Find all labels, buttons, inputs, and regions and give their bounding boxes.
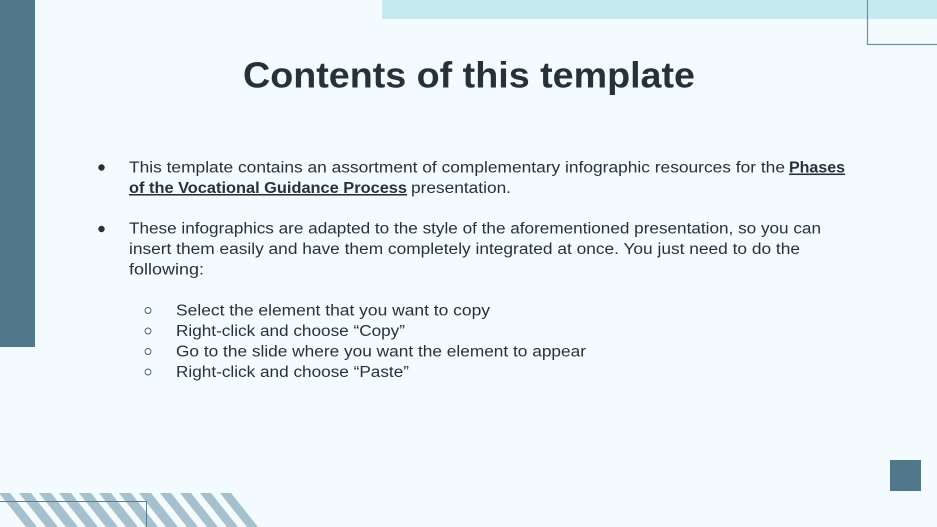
bottom left outlined box (0, 502, 146, 527)
bullet item 1: presentation. (411, 180, 511, 197)
bullet list (98, 160, 845, 381)
left vertical bar (0, 0, 35, 347)
top right outlined box (868, 0, 937, 44)
title: Contents of this template (243, 54, 695, 96)
sub-list steps: Go to the slide where you want the element to appear (176, 344, 586, 360)
sub-list steps (145, 302, 586, 381)
sub-list steps: Right-click and choose “Paste” (176, 364, 409, 381)
bullet item 2: These infographics are adapted to the style of the aforementioned presentation, so you can (129, 220, 821, 238)
sub-list steps: Select the element that you want to copy (176, 302, 490, 320)
bullet item 2: following: (129, 262, 204, 278)
bottom right square (890, 460, 921, 491)
bottom left striped pattern (0, 493, 258, 527)
bullet item 1: Phases (789, 160, 845, 176)
bullet item 1: This template contains an assortment of complementary infographic resources for the (129, 160, 785, 176)
bullet item 2: insert them easily and have them completely integrated at once. You just need to do the (129, 241, 800, 258)
sub-list steps: Right-click and choose “Copy” (176, 323, 405, 340)
bullet item 2 (98, 220, 821, 278)
bullet item 1: of the Vocational Guidance Process (129, 180, 407, 197)
top right light bar (382, 0, 937, 19)
bullet item 1 (98, 160, 845, 197)
